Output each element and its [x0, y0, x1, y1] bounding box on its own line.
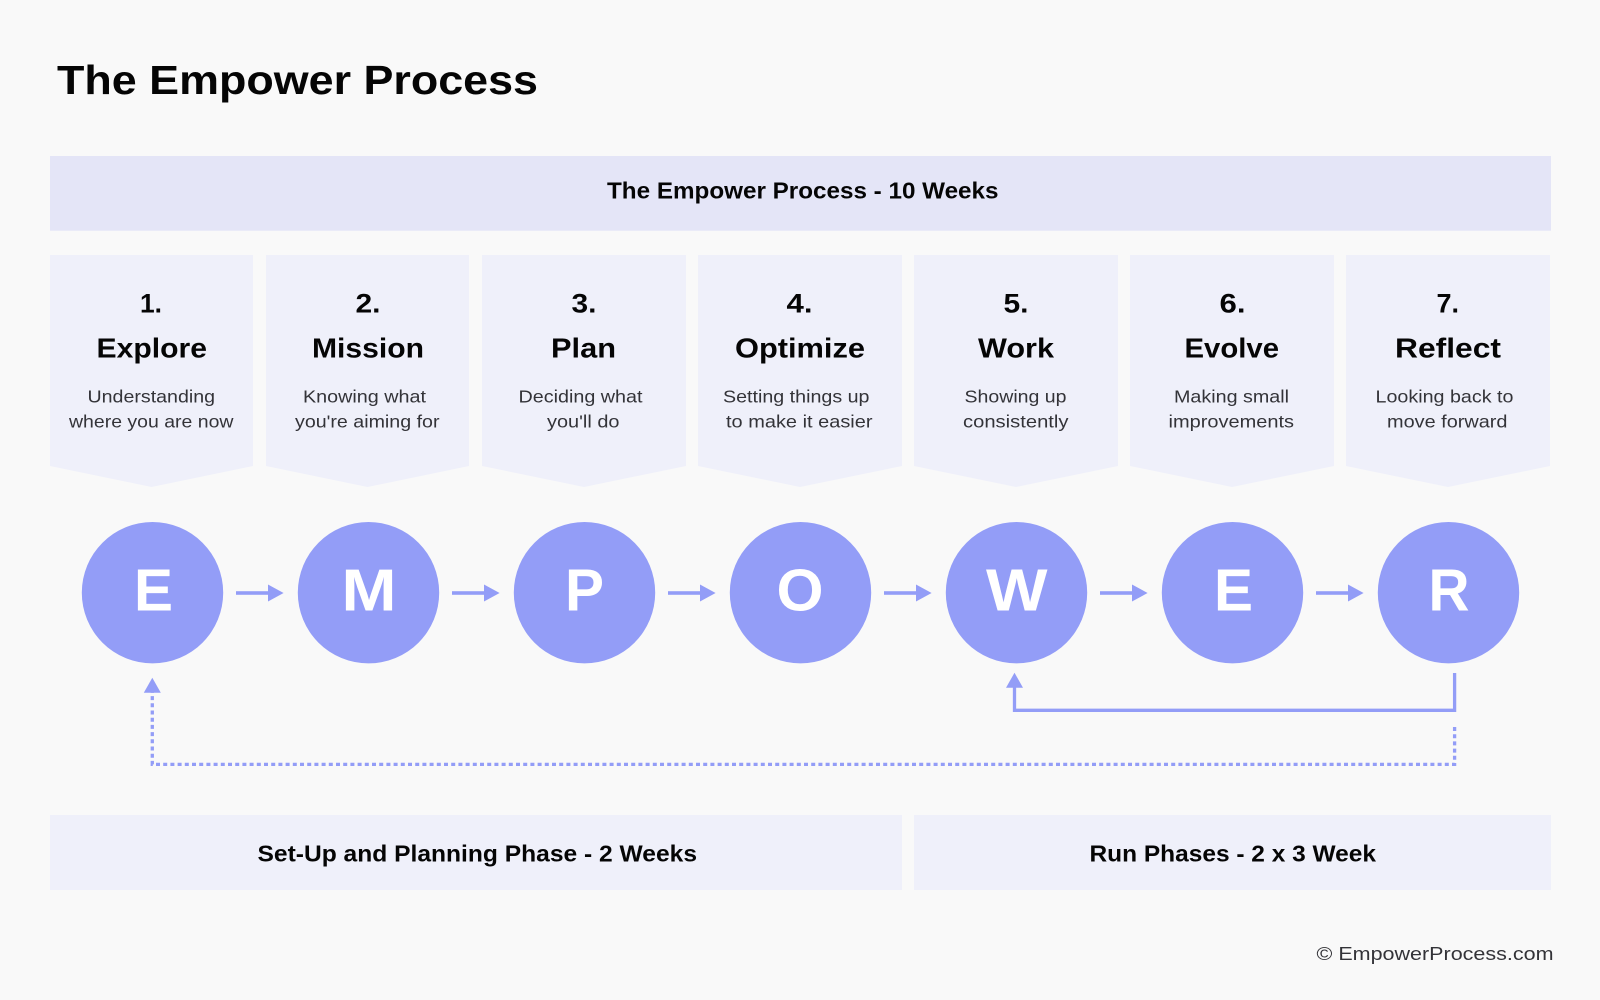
panel: set-up and planning phase — [50, 815, 902, 890]
panel: step 3 plan — [482, 255, 686, 487]
circle: M: M — [342, 558, 396, 624]
circle: E second — [1162, 522, 1303, 663]
step name: Work — [978, 332, 1054, 363]
step number: 2. — [356, 289, 380, 319]
card shape — [266, 255, 469, 487]
card shape — [698, 255, 902, 487]
step description: Looking back to — [1376, 387, 1514, 407]
step name: Evolve — [1184, 332, 1279, 363]
footer copyright: © EmpowerProcess.com — [1316, 943, 1554, 964]
panel: step 2 mission — [266, 255, 469, 487]
step name: Optimize — [735, 332, 865, 363]
step description — [963, 387, 1069, 432]
step name: Mission — [312, 332, 424, 363]
circle: W: W — [986, 558, 1048, 624]
step description: Setting things up — [723, 387, 870, 407]
step number: 3. — [572, 289, 596, 319]
title: The Empower Process — [57, 57, 538, 103]
step description: consistently — [963, 412, 1069, 432]
arrow: E to R — [1316, 584, 1364, 602]
arrow: E to M — [236, 584, 284, 602]
step description: Deciding what — [518, 387, 643, 407]
arrow: dotted loop from R back to E — [144, 678, 1455, 764]
step name: Explore — [96, 332, 207, 363]
panel: run phases — [914, 815, 1551, 890]
step description — [723, 387, 873, 432]
circle: W — [946, 522, 1087, 663]
circle: P: P — [565, 558, 604, 624]
panel: step 1 explore — [50, 255, 253, 487]
step description: to make it easier — [726, 412, 873, 432]
step description — [1168, 387, 1294, 432]
circle: R: R — [1428, 558, 1470, 624]
arrow: solid loop from R back to W — [1006, 673, 1455, 710]
step name: Plan — [551, 332, 616, 363]
banner: 10 weeks — [50, 156, 1551, 231]
step number: 7. — [1436, 289, 1459, 319]
card shape — [482, 255, 686, 487]
circle: E — [82, 522, 223, 663]
step description: move forward — [1387, 412, 1508, 432]
step description — [295, 387, 440, 432]
step number: 1. — [140, 289, 162, 319]
step number: 6. — [1220, 289, 1246, 319]
card shape — [914, 255, 1118, 487]
card shape — [1130, 255, 1334, 487]
circle: M — [298, 522, 439, 663]
circle: O: O — [776, 558, 824, 624]
step description — [68, 387, 234, 432]
circle: R — [1378, 522, 1519, 663]
circle: E second: E — [1214, 558, 1253, 624]
step description — [1376, 387, 1514, 432]
step number: 5. — [1004, 289, 1028, 319]
step number: 4. — [786, 289, 812, 319]
circle: O — [730, 522, 871, 663]
arrow: W to E — [1100, 584, 1148, 602]
circle: P — [514, 522, 655, 663]
phase label: Run Phases - 2 x 3 Week — [1090, 841, 1376, 867]
circle: E: E — [134, 558, 173, 624]
step description: Knowing what — [303, 387, 426, 407]
step description: where you are now — [68, 412, 234, 432]
step description: you're aiming for — [295, 412, 440, 432]
step description: you'll do — [547, 412, 620, 432]
arrow: P to O — [668, 584, 716, 602]
step description: improvements — [1168, 412, 1294, 432]
panel: step 6 evolve — [1130, 255, 1334, 487]
banner label: The Empower Process - 10 Weeks — [607, 177, 998, 203]
arrow: M to P — [452, 584, 500, 602]
phase label: Set-Up and Planning Phase - 2 Weeks — [258, 841, 697, 867]
step description — [518, 387, 643, 432]
step description: Understanding — [88, 387, 215, 407]
step description: Showing up — [964, 387, 1066, 407]
step description: Making small — [1174, 387, 1289, 407]
card shape — [1346, 255, 1550, 487]
panel: step 7 reflect — [1346, 255, 1550, 487]
panel: step 5 work — [914, 255, 1118, 487]
card shape — [50, 255, 253, 487]
arrow: O to W — [884, 584, 932, 602]
panel: step 4 optimize — [698, 255, 902, 487]
step name: Reflect — [1395, 332, 1501, 363]
